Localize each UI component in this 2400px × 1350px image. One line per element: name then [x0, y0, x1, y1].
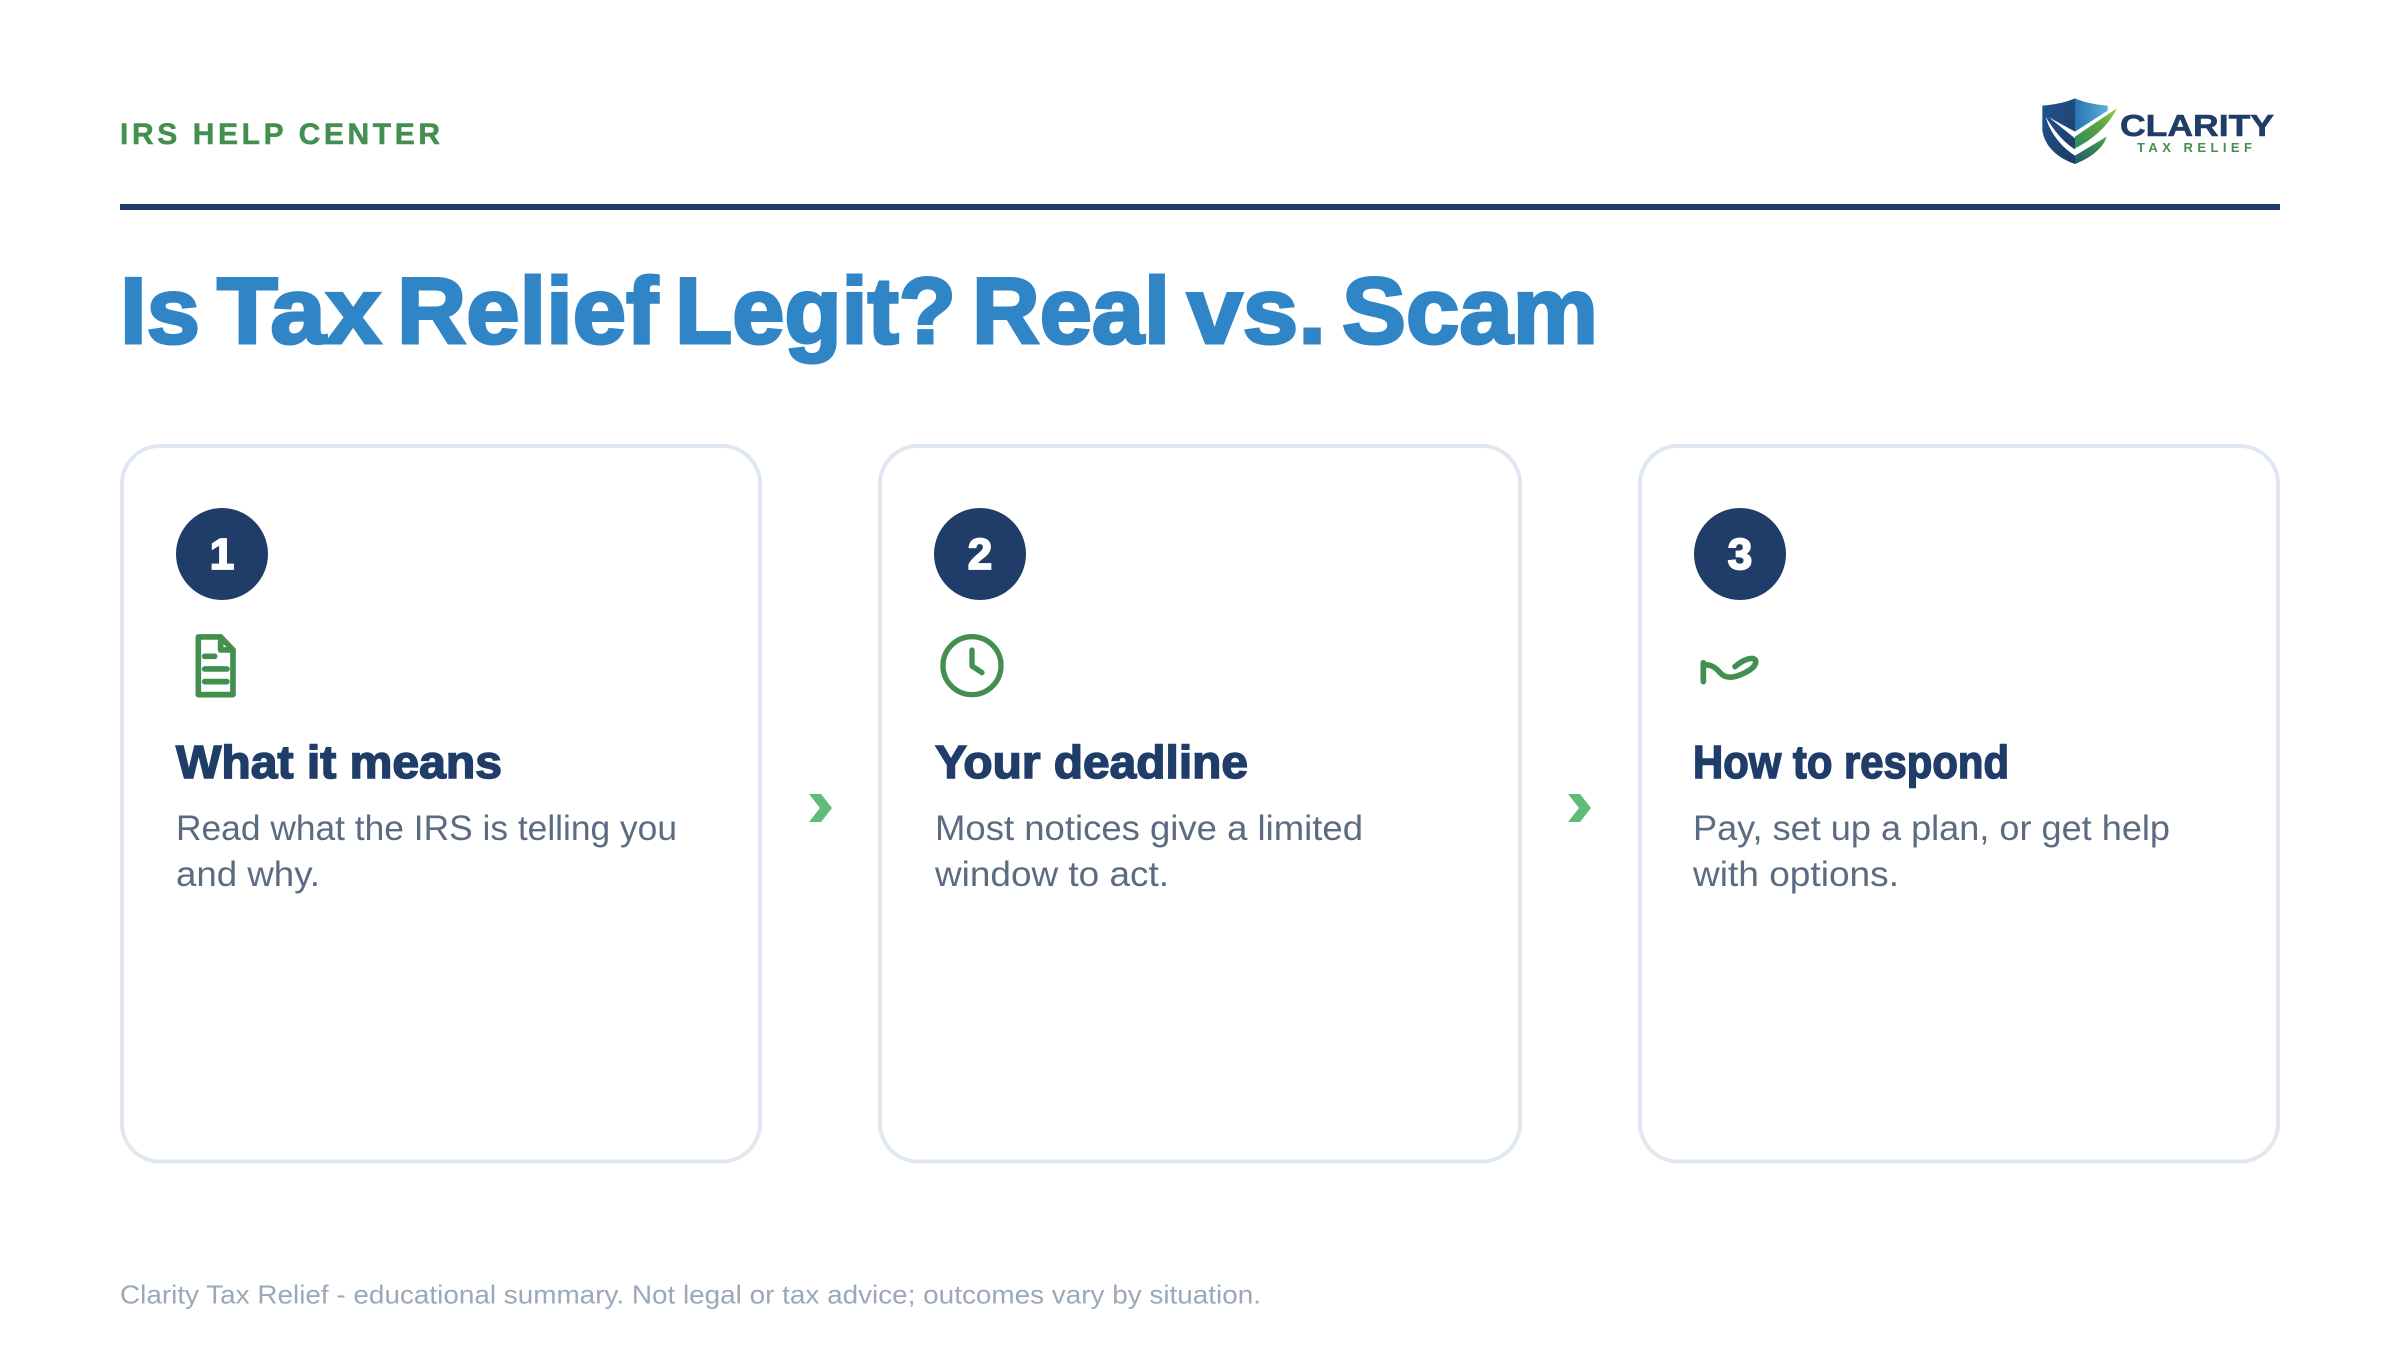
card frame: [122, 446, 760, 1162]
arrow 2: [1568, 794, 1591, 822]
description: window to act.: [934, 855, 1169, 894]
icon: document: [198, 637, 233, 695]
description: with options.: [1692, 855, 1899, 894]
title: Legit?: [675, 258, 956, 363]
panel: step 1, what it means: [122, 446, 760, 1162]
description: Read what the IRS is telling you: [176, 809, 677, 848]
icon: clock: [943, 637, 1001, 695]
title: [120, 258, 1598, 363]
number badge 3: 3: [1728, 530, 1752, 579]
number badge 3: [1694, 508, 1786, 600]
icon: handshake squiggle: [1703, 658, 1756, 682]
number badge 2: 2: [968, 530, 992, 579]
description: [1692, 809, 2170, 894]
number badge 1: 1: [210, 530, 234, 579]
card frame: [880, 446, 1520, 1162]
title: Real: [972, 258, 1170, 363]
arrow 1: [809, 794, 832, 822]
title: Relief: [397, 258, 659, 363]
description: [176, 809, 677, 894]
panel: step 2, your deadline: [880, 446, 1520, 1162]
card frame: [1640, 446, 2278, 1162]
tagline: TAX RELIEF: [2137, 140, 2252, 155]
logo: Clarity Tax Relief: [2042, 98, 2274, 164]
panel: step 3, how to respond: [1640, 446, 2278, 1162]
title: Tax: [217, 258, 381, 363]
header label: IRS HELP CENTER: [120, 118, 440, 151]
description: Pay, set up a plan, or get help: [1693, 809, 2170, 848]
description: Most notices give a limited: [935, 809, 1363, 848]
description: [934, 809, 1363, 894]
heading: What it means: [176, 736, 502, 788]
heading: Your deadline: [935, 736, 1248, 788]
header rule: [120, 204, 2280, 210]
description: and why.: [176, 855, 320, 894]
wordmark: CLARITY: [2120, 108, 2274, 143]
title: Is: [120, 258, 200, 363]
number badge 2: [934, 508, 1026, 600]
icon: shield with check: [2042, 98, 2117, 164]
heading: How to respond: [1693, 736, 2009, 788]
title: vs.: [1187, 258, 1326, 363]
footer disclaimer: Clarity Tax Relief - educational summary. Not legal or tax advice; outcomes vary by situation.: [120, 1280, 1261, 1310]
title: Scam: [1342, 258, 1598, 363]
number badge 1: [176, 508, 268, 600]
